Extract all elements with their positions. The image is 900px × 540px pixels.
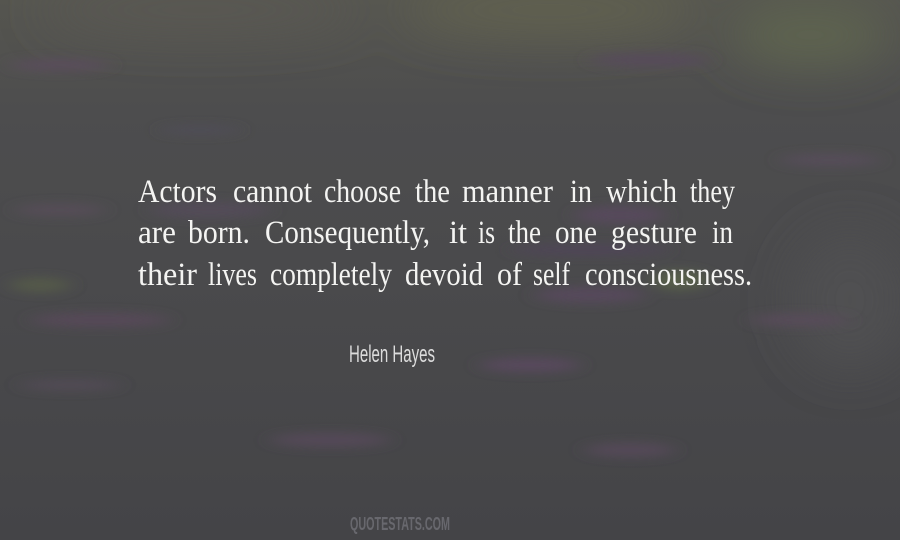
quote line 3: completely bbox=[270, 257, 392, 293]
quote text bbox=[138, 174, 752, 293]
quote line 1: manner bbox=[462, 174, 553, 210]
quote line 3: their bbox=[138, 257, 197, 293]
quote line 2: born. bbox=[188, 215, 250, 251]
quote line 2: Consequently, bbox=[265, 215, 430, 251]
quote line 1: which bbox=[606, 174, 677, 210]
quote line 1: choose bbox=[324, 174, 401, 210]
quote line 3: devoid bbox=[405, 257, 483, 293]
quote line 3: of bbox=[497, 257, 522, 293]
quote line 2: one bbox=[555, 215, 597, 251]
quote line 1: in bbox=[570, 174, 592, 210]
author name: Helen Hayes bbox=[349, 341, 435, 368]
quote line 3: consciousness. bbox=[585, 257, 752, 293]
quote line 2: in bbox=[712, 215, 733, 251]
quote line 1: the bbox=[415, 174, 450, 210]
quote line 1: they bbox=[690, 174, 735, 210]
quote line 1: Actors bbox=[138, 174, 217, 210]
quote line 2: it bbox=[449, 215, 467, 251]
quote line 2: the bbox=[508, 215, 541, 251]
watermark: QUOTESTATS.COM bbox=[350, 514, 450, 534]
quote line 2: are bbox=[138, 215, 176, 251]
quote line 3: lives bbox=[208, 257, 257, 293]
quote line 3: self bbox=[533, 257, 570, 293]
quote line 2: gesture bbox=[611, 215, 697, 251]
quote line 2: is bbox=[478, 215, 495, 251]
quote line 1: cannot bbox=[233, 174, 312, 210]
